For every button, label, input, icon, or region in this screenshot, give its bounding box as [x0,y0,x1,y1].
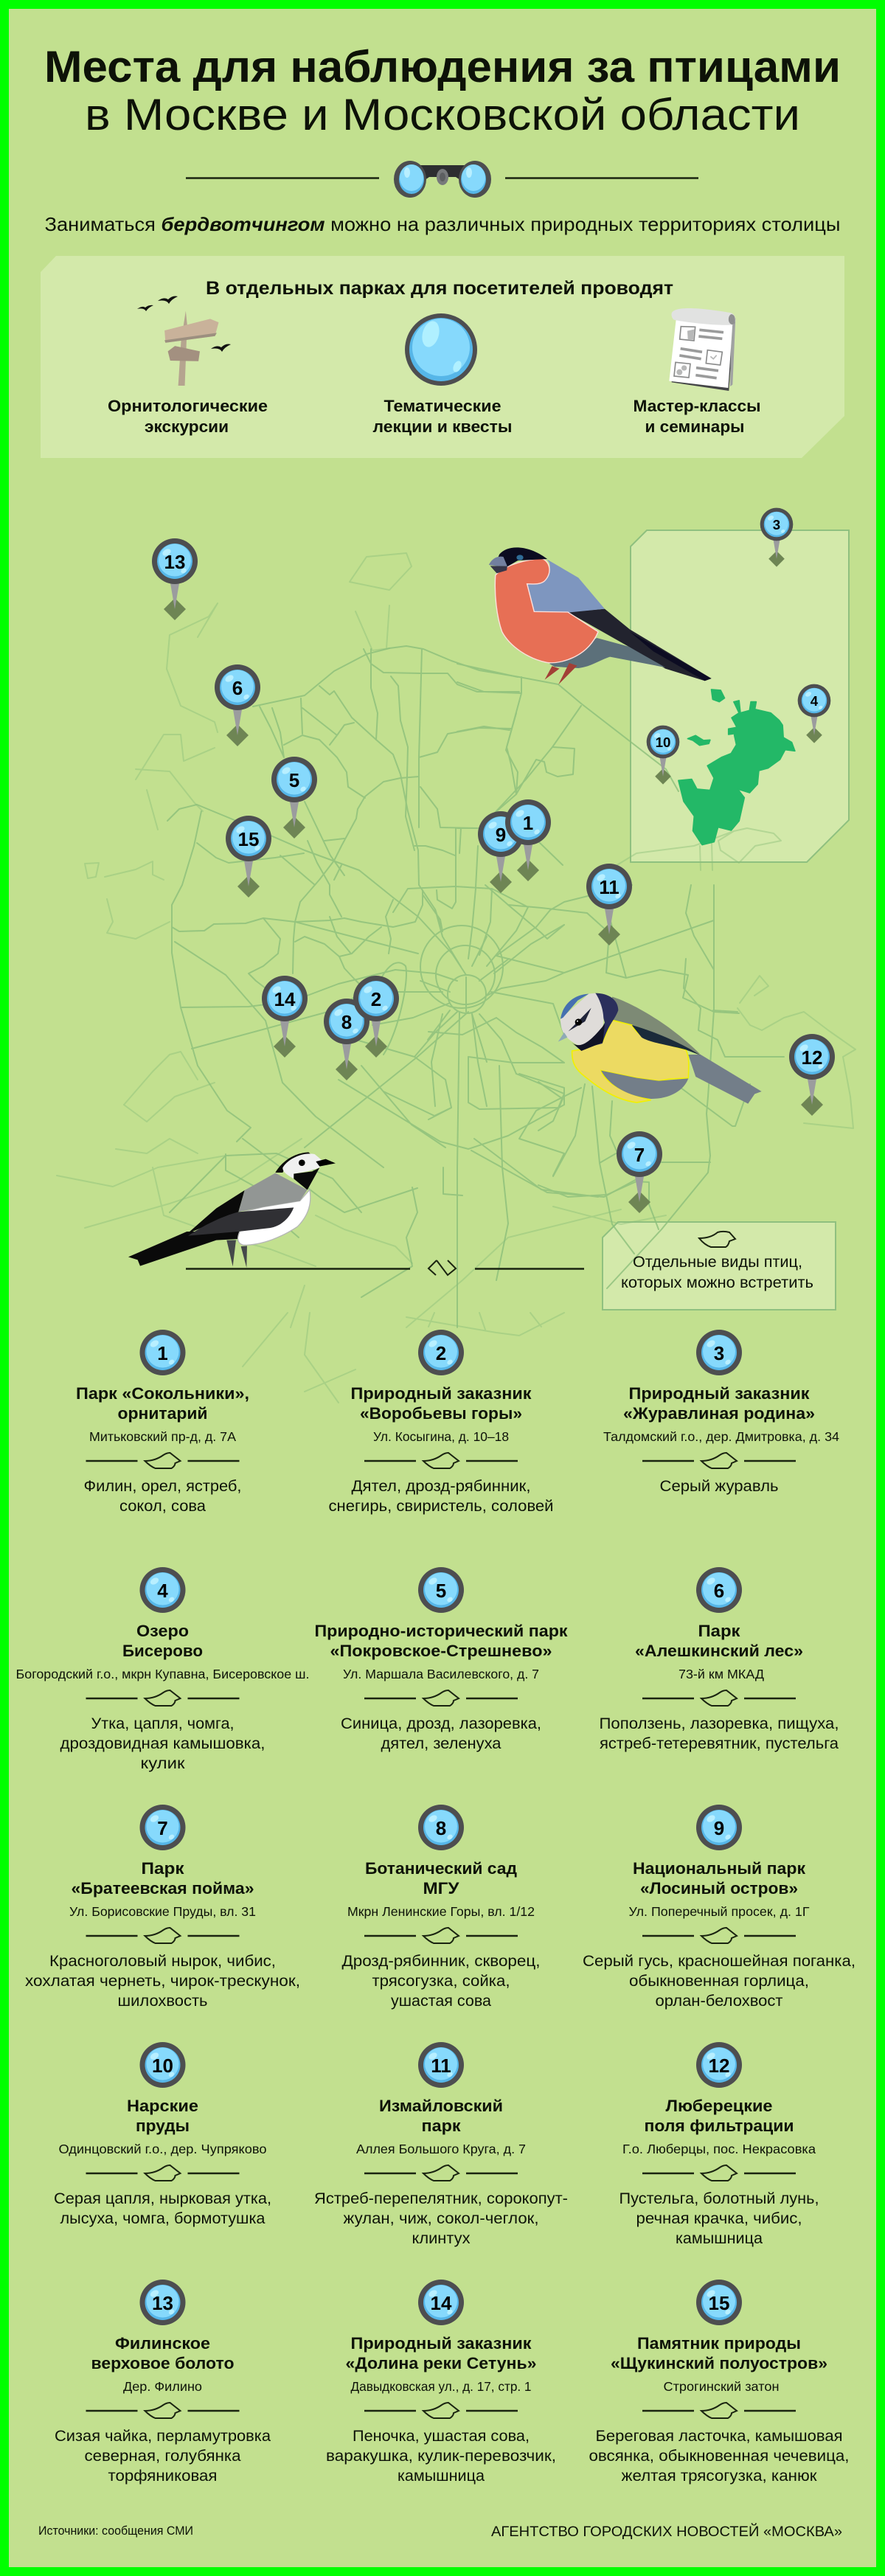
name: парк [422,2117,462,2135]
map pin 10: 10 [656,735,670,750]
entry 13: 13 [152,2292,173,2314]
species: Сизая чайка, перламутровка [55,2428,271,2445]
species: Синица, дрозд, лазоревка, [341,1715,541,1732]
caption: workshops: и семинары [645,417,745,436]
divider icon [364,1928,518,1943]
name: «Алешкинский лес» [635,1642,803,1660]
entry 2: 2 [436,1342,446,1364]
name: Природный заказник [350,1384,532,1403]
map pin 8 [324,999,369,1080]
name [314,1622,569,1660]
agency credit: АГЕНТСТВО ГОРОДСКИХ НОВОСТЕЙ «МОСКВА» [491,2522,842,2540]
name: Национальный парк [633,1859,806,1878]
species: обыкновенная горлица, [629,1973,809,1990]
name [623,1384,815,1423]
name: Парк «Сокольники», [76,1384,249,1403]
name: «Лосиный остров» [640,1879,798,1898]
species [54,2190,271,2227]
name: Озеро [136,1622,189,1640]
map pin 13 [152,538,198,620]
header divider with binoculars [186,161,698,198]
map pin 5 [271,757,317,839]
address: Ул. Борисовские Пруды, вл. 31 [69,1904,256,1919]
address: Дер. Филино [123,2379,202,2394]
map pin 7: 7 [634,1144,645,1166]
legend panel [603,1222,836,1310]
map pin 3 [760,508,793,567]
entry 14 [326,2280,556,2485]
illustration: bullfinch [489,547,712,684]
entry 12: 12 [709,2055,729,2077]
divider icon [364,2403,518,2418]
icon: notepad [669,308,735,391]
species [620,2190,819,2247]
address: Давыдковская ул., д. 17, стр. 1 [351,2379,531,2394]
entry 7: 7 [157,1817,168,1839]
species: Дятел, дрозд-рябинник, [352,1478,530,1495]
map pin 11: 11 [599,876,620,898]
entry 8: 8 [436,1817,446,1839]
name [635,1622,803,1660]
title: в Москве и Московской области [85,90,800,139]
map pin 9 [478,811,524,893]
name: Филинское [115,2334,210,2353]
map pin 13: 13 [164,551,185,573]
entry 15: 15 [709,2292,729,2314]
species: кулик [140,1755,185,1772]
name [76,1384,249,1423]
map pin 5: 5 [289,769,299,791]
entry 2 [329,1330,553,1515]
map pin 2 [353,976,399,1058]
name: Природно-исторический парк [314,1622,569,1640]
species [341,1715,541,1752]
map pin 14 [262,976,308,1058]
divider icon [364,2165,518,2181]
source note: Источники: сообщения СМИ [38,2524,193,2538]
entry 13 [55,2280,271,2485]
name: МГУ [423,1879,459,1898]
map pin 1 [505,799,551,881]
address: Ул. Поперечный просек, д. 1Г [628,1904,810,1919]
name [365,1859,517,1898]
map pin 10 [647,726,679,785]
name [351,1384,532,1423]
species: варакушка, кулик-перевозчик, [326,2448,556,2465]
species: снегирь, свиристель, соловей [329,1498,553,1515]
species: камышница [676,2230,763,2247]
species: хохлатая чернеть, чирок-трескунок, [25,1973,300,1990]
entry 12 [620,2042,819,2247]
map pin 12: 12 [802,1046,822,1069]
entry 15 [589,2280,850,2485]
name: «Братеевская пойма» [71,1879,254,1898]
map region: Losiny Ostrov green area [678,690,795,845]
map pin 2: 2 [371,988,381,1010]
map pin 3: 3 [773,517,780,532]
name: Парк [141,1859,185,1878]
species: Серый журавль [659,1478,779,1495]
divider icon [364,1453,518,1468]
species: торфяниковая [108,2468,217,2485]
entry 8 [342,1805,540,2010]
map pin 15 [226,816,271,898]
address: Талдомский г.о., дер. Дмитровка, д. 34 [603,1429,839,1444]
name: Бисерово [122,1642,203,1660]
name [91,2334,235,2372]
legend note: Отдельные виды птиц, [633,1253,802,1271]
caption: excursions [108,397,268,436]
species [599,1715,839,1752]
entry 10 [54,2042,271,2227]
entry 6: 6 [714,1580,724,1602]
address: Г.о. Люберцы, пос. Некрасовка [622,2142,816,2156]
name [127,2097,198,2135]
species: лысуха, чомга, бормотушка [60,2210,266,2227]
inset panel: Moscow region [631,530,849,862]
divider icon [86,2165,239,2181]
species [84,1478,242,1515]
name [122,1622,203,1660]
address: Ул. Маршала Василевского, д. 7 [343,1667,539,1681]
caption: lectures: лекции и квесты [373,417,512,436]
address: Богородский г.о., мкрн Купавна, Бисеровское ш. [16,1667,310,1681]
divider icon [642,2403,796,2418]
species [314,2190,568,2247]
name: Природный заказник [350,2334,532,2353]
species: дятел, зеленуха [381,1735,502,1752]
section divider [186,1260,584,1275]
address: Митьковский пр-д, д. 7А [89,1429,236,1444]
species: Дрозд-рябинник, скворец, [342,1953,540,1970]
name [71,1859,254,1898]
divider icon [86,1928,239,1943]
species: Береговая ласточка, камышовая [596,2428,842,2445]
icon: lens [405,313,477,386]
intro text: Заниматься бердвотчингом можно на различных природных территориях столицы [44,213,841,235]
map: Moscow road network [57,553,856,1403]
name: Ботанический сад [365,1859,517,1878]
legend note: которых можно встретить [621,1274,813,1291]
species [342,1953,540,2010]
divider icon [86,2403,239,2418]
caption: workshops [633,397,761,436]
entry 4 [16,1567,310,1772]
species: Серая цапля, нырковая утка, [54,2190,271,2207]
species: Филин, орел, ястреб, [84,1478,242,1495]
species [25,1953,300,2010]
name: «Покровское-Стрешнево» [330,1642,552,1660]
entry 3 [603,1330,839,1495]
map pin 6: 6 [232,677,243,699]
species: северная, голубянка [84,2448,241,2465]
illustration: white wagtail [128,1152,336,1268]
map pin 4: 4 [811,693,819,709]
icon: signpost with birds [137,296,231,386]
entry 4: 4 [157,1580,168,1602]
species: дроздовидная камышовка, [60,1735,266,1752]
title [44,42,841,139]
divider icon [642,1690,796,1706]
divider icon [364,1690,518,1706]
species: клинтух [412,2230,471,2247]
name: Люберецкие [665,2097,773,2115]
species [55,2428,271,2485]
species: ястреб-тетеревятник, пустельга [600,1735,839,1752]
caption: excursions: экскурсии [145,417,229,436]
map pin 15: 15 [238,828,259,850]
species: шилохвость [117,1993,208,2010]
title: Места для наблюдения за птицами [44,42,841,91]
species [583,1953,856,2010]
entry 5 [314,1567,569,1752]
name: Парк [698,1622,741,1640]
species [60,1715,266,1772]
name [379,2097,503,2135]
map pin 1: 1 [523,812,533,834]
caption: lectures [373,397,512,436]
species [589,2428,850,2485]
map pin 14: 14 [274,988,296,1010]
caption: excursions: Орнитологические [108,397,268,415]
name [633,1859,806,1898]
map pin 8: 8 [341,1011,352,1033]
species [326,2428,556,2485]
name: Измайловский [379,2097,503,2115]
species: Пеночка, ушастая сова, [353,2428,530,2445]
icon: binoculars [394,161,491,198]
species: Поползень, лазоревка, пищуха, [599,1715,839,1732]
address: Мкрн Ленинские Горы, вл. 1/12 [347,1904,535,1919]
entry 9 [583,1805,856,2010]
map pin 11 [586,864,632,945]
address: Строгинский затон [663,2379,780,2394]
species: Пустельга, болотный лунь, [620,2190,819,2207]
entry 1: 1 [157,1342,168,1364]
species: трясогузка, сойка, [372,1973,510,1990]
address: Одинцовский г.о., дер. Чупряково [59,2142,267,2156]
map pin 7 [617,1131,662,1213]
entry 14: 14 [431,2292,452,2314]
panel heading: В отдельных парках для посетителей проводят [206,278,673,299]
map pin 9: 9 [496,824,506,846]
name: «Воробьевы горы» [360,1404,522,1423]
species: камышница [398,2468,485,2485]
species: орлан-белохвост [655,1993,783,2010]
name: пруды [136,2117,190,2135]
species: Утка, цапля, чомга, [91,1715,234,1732]
map pin 12 [789,1034,835,1116]
address: 73-й км МКАД [678,1667,764,1681]
address: Аллея Большого Круга, д. 7 [356,2142,526,2156]
species: Ястреб-перепелятник, сорокопут- [314,2190,568,2207]
entry 7 [25,1805,300,2010]
map pin 4 [798,684,830,743]
entry 11 [314,2042,568,2247]
divider icon [86,1453,239,1468]
name: Нарские [127,2097,198,2115]
name: верховое болото [91,2354,235,2372]
name: Природный заказник [628,1384,811,1403]
divider icon [642,1453,796,1468]
name: «Журавлиная родина» [623,1404,815,1423]
name: поля фильтрации [645,2117,794,2135]
name: «Долина реки Сетунь» [345,2354,537,2372]
name [645,2097,794,2135]
divider icon [86,1690,239,1706]
species: Красноголовый нырок, чибис, [49,1953,276,1970]
entry 5: 5 [436,1580,446,1602]
name [345,2334,537,2372]
name: Памятник природы [637,2334,801,2353]
panel: activities in parks [41,256,844,458]
caption: workshops: Мастер-классы [633,397,761,415]
species [329,1478,553,1515]
species: желтая трясогузка, канюк [621,2468,817,2485]
name: «Щукинский полуостров» [611,2354,827,2372]
species: сокол, сова [119,1498,206,1515]
species: Серый гусь, красношейная поганка, [583,1953,856,1970]
name: орнитарий [118,1404,208,1423]
entry 6 [599,1567,839,1752]
legend note [621,1232,813,1291]
species: ушастая сова [391,1993,491,2010]
species: овсянка, обыкновенная чечевица, [589,2448,850,2465]
entry 1 [76,1330,249,1515]
illustration: blue tit [558,993,762,1104]
divider icon [642,2165,796,2181]
caption: lectures: Тематические [384,397,502,415]
entry 3: 3 [714,1342,724,1364]
entry 10: 10 [152,2055,173,2077]
map pin 6 [215,664,260,746]
entry 9: 9 [714,1817,724,1839]
address: Ул. Косыгина, д. 10–18 [373,1429,509,1444]
species: речная крачка, чибис, [636,2210,802,2227]
divider icon [642,1928,796,1943]
name [611,2334,827,2372]
species: жулан, чиж, сокол-чеглок, [344,2210,538,2227]
entry 11: 11 [431,2055,451,2077]
